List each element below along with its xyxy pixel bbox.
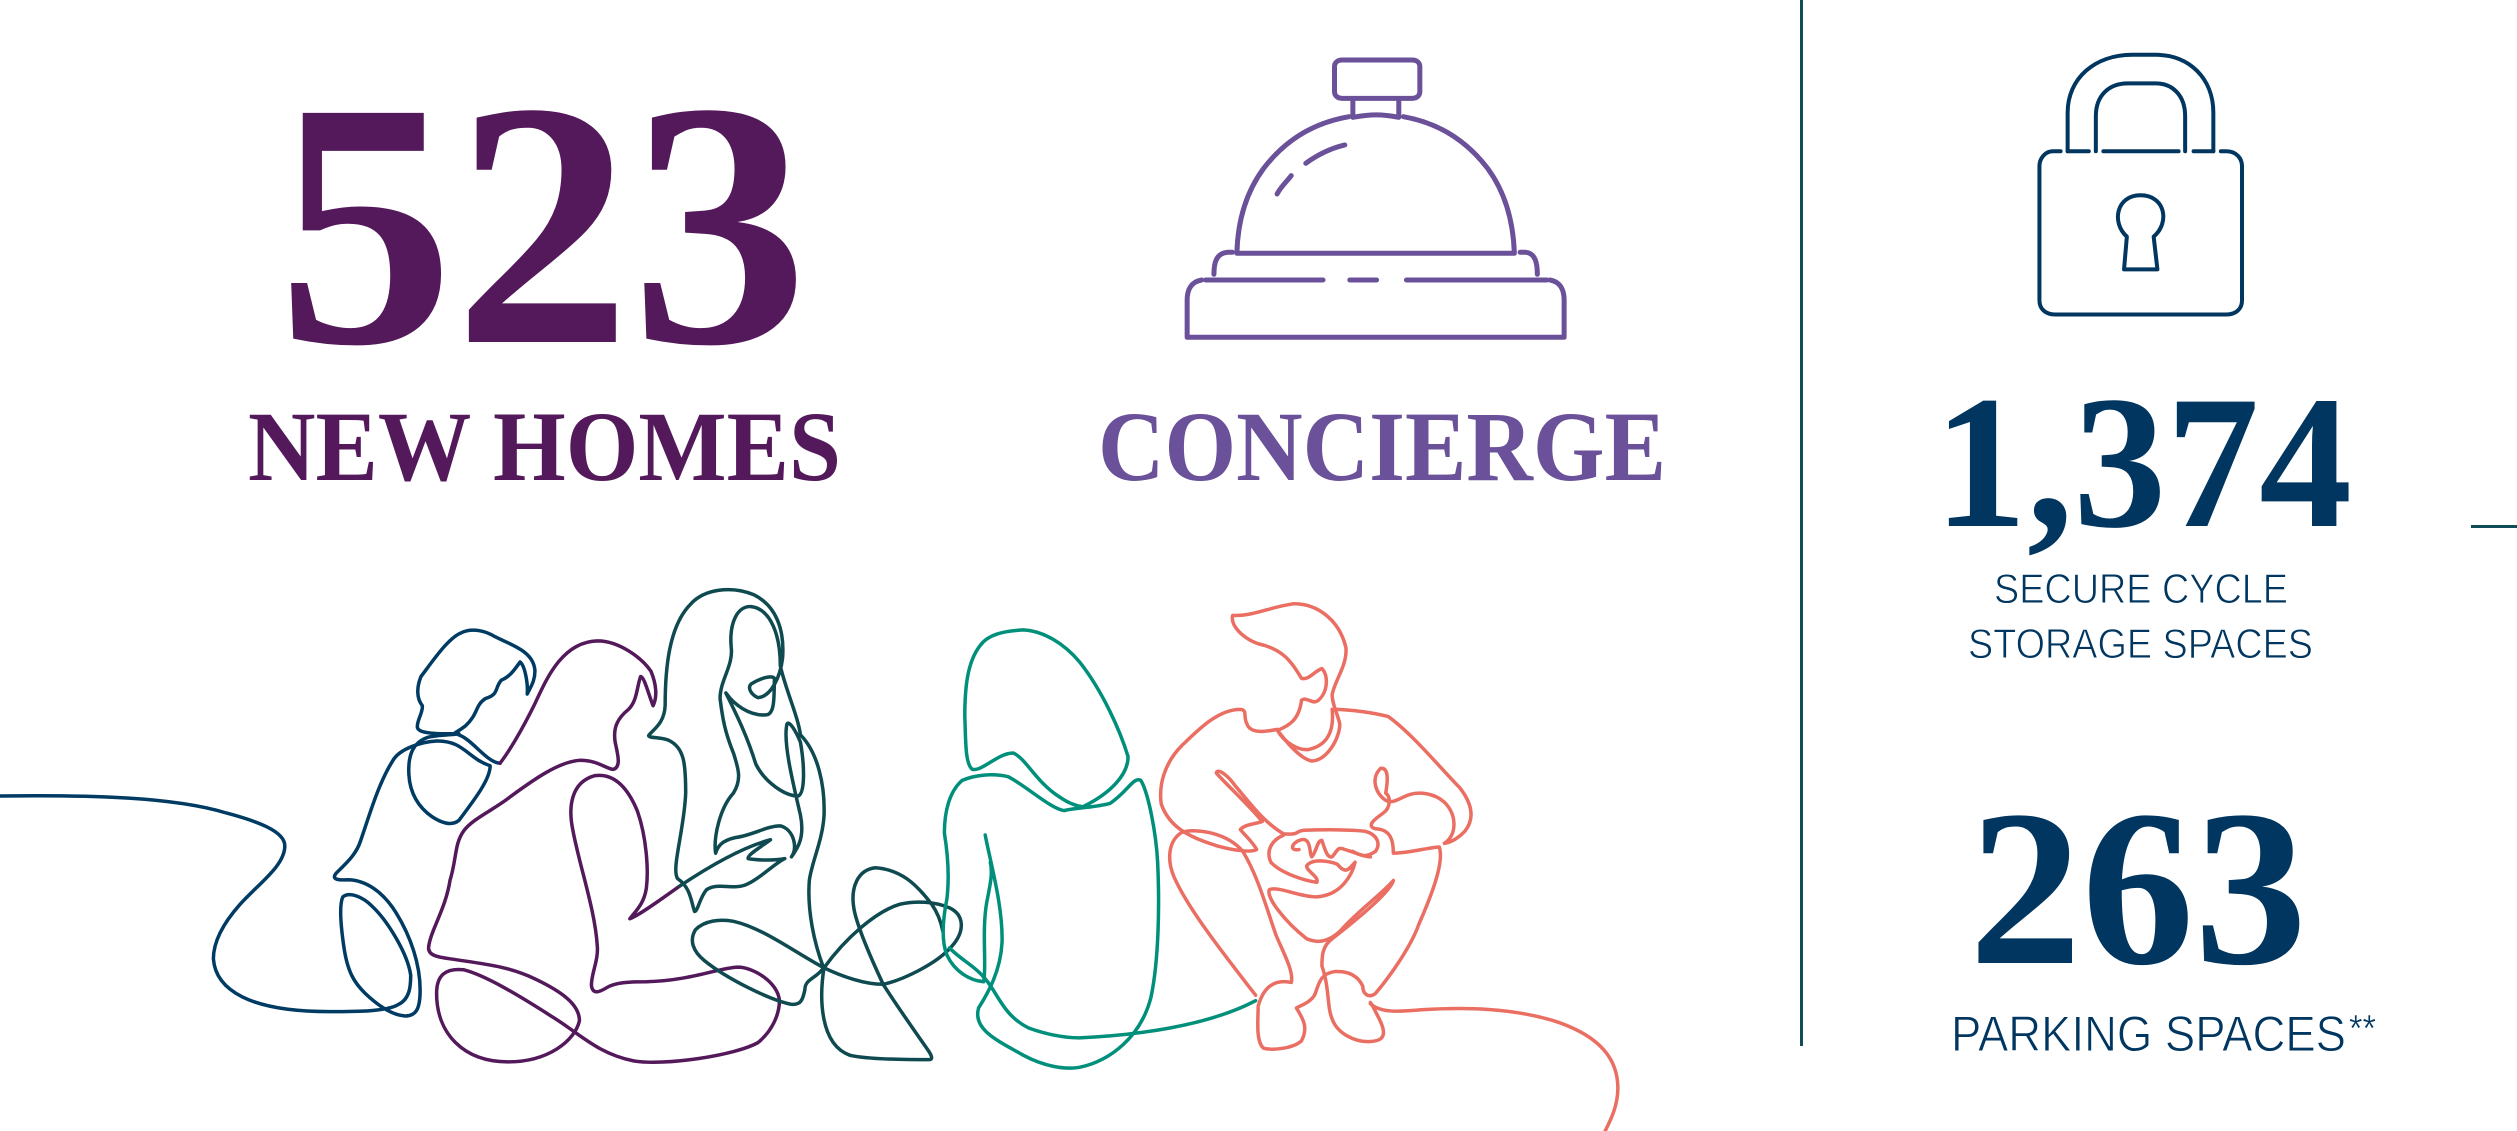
figure: dark teal loops <box>822 868 961 1060</box>
vertical divider <box>1800 0 1803 1046</box>
stat label: secure cycle storage spaces: SECURE CYCLE <box>1994 565 2288 612</box>
figure: purple person <box>429 641 779 1062</box>
stat: 263 number: 263 <box>1969 765 2307 1012</box>
stat label: secure cycle storage spaces <box>1968 565 2313 667</box>
stat: 523 number: 523 <box>277 30 808 418</box>
figure: dark teal person <box>649 590 883 1004</box>
stat: 1,374 number: 1,374 <box>1934 358 2352 568</box>
figure: green person <box>943 630 1256 1068</box>
figure: navy person <box>0 630 535 1016</box>
stat label: concierge: CONCIERGE <box>1098 391 1666 502</box>
stat label: new homes: NEW HOMES <box>248 391 841 502</box>
illustration: continuous line people sitting <box>0 590 1618 1131</box>
stat label: parking spaces: ** <box>2349 1008 2376 1050</box>
stat label: parking spaces: PARKING SPACES <box>1951 1006 2346 1062</box>
stat label: secure cycle storage spaces: STORAGE SPACES <box>1968 620 2313 667</box>
icon: concierge bell <box>1187 60 1564 337</box>
figure: coral person <box>1161 604 1618 1131</box>
short dash at right edge <box>2471 525 2517 528</box>
icon: padlock <box>2039 55 2242 314</box>
